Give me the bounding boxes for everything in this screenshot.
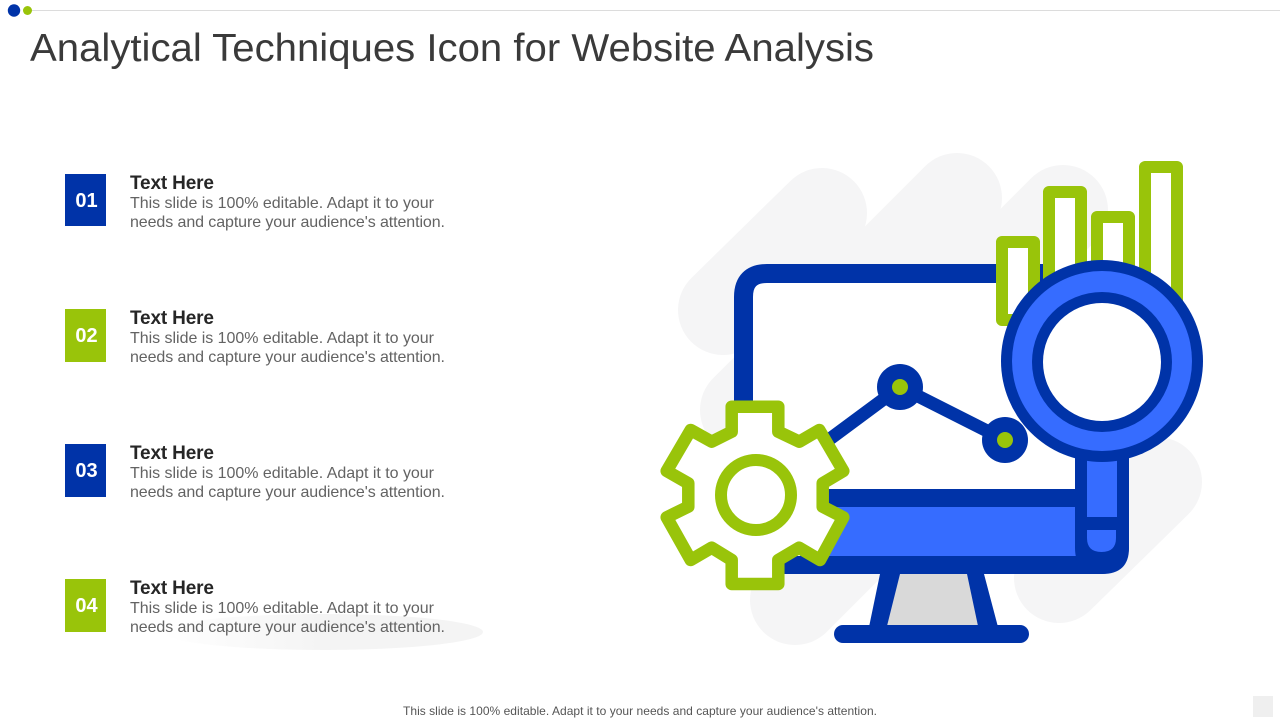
item 02 body text: This slide is 100% editable. Adapt it to your	[130, 330, 435, 347]
ellipse shadow under list	[163, 614, 483, 650]
magnifying glass	[1001, 260, 1203, 574]
item 01 heading: Text Here	[130, 173, 214, 194]
item 03 body text	[130, 465, 445, 501]
item 01 body text: This slide is 100% editable. Adapt it to your	[130, 195, 435, 212]
item 04 body text	[130, 600, 445, 636]
number badge 03	[65, 444, 106, 497]
item 02 body text	[130, 330, 445, 366]
gear icon	[667, 407, 843, 584]
background blobs	[723, 198, 1157, 600]
list item 01	[65, 173, 445, 231]
number badge 01: 01	[75, 190, 98, 212]
title: Analytical Techniques Icon for Website Analysis	[30, 27, 874, 70]
number badge 01	[65, 174, 106, 226]
monitor	[744, 274, 1129, 574]
number badge 03: 03	[75, 460, 98, 482]
monitor stand	[834, 574, 1029, 643]
item 04 heading: Text Here	[130, 578, 214, 599]
number badge 04: 04	[75, 595, 98, 617]
number badge 02	[65, 309, 106, 362]
item 02 heading: Text Here	[130, 308, 214, 329]
item 03 heading: Text Here	[130, 443, 214, 464]
line chart	[815, 364, 1028, 463]
list item 03	[65, 443, 445, 501]
item 02 body text: needs and capture your audience's attention.	[130, 349, 445, 366]
footer note: This slide is 100% editable. Adapt it to your needs and capture your audience's attention.	[403, 704, 877, 718]
item 04 body text: This slide is 100% editable. Adapt it to your	[130, 600, 435, 617]
illustration: analytics monitor with gear and magnifier	[667, 167, 1203, 643]
item 03 body text: needs and capture your audience's attention.	[130, 484, 445, 501]
header decoration: dots and rule	[8, 4, 1280, 17]
number badge 04	[65, 579, 106, 632]
number badge 02: 02	[75, 325, 98, 347]
list item 04	[65, 578, 445, 636]
item 03 body text: This slide is 100% editable. Adapt it to your	[130, 465, 435, 482]
item 01 body text: needs and capture your audience's attention.	[130, 214, 445, 231]
item 04 body text: needs and capture your audience's attention.	[130, 619, 445, 636]
bar chart	[1002, 167, 1177, 320]
page number placeholder	[1253, 696, 1273, 717]
list item 02	[65, 308, 445, 366]
item 01 body text	[130, 195, 445, 231]
